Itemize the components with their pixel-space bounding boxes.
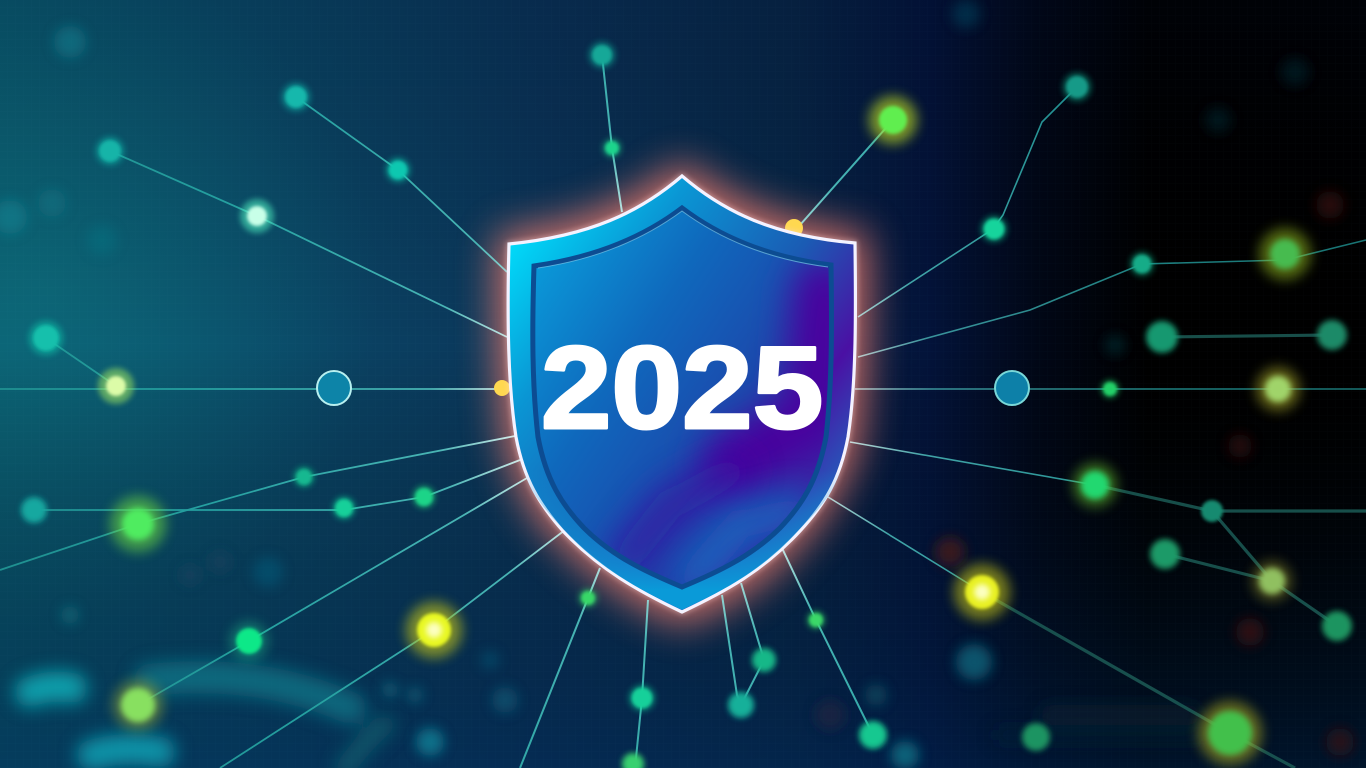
node: top-right lime (869, 96, 917, 144)
shield inner border (533, 208, 831, 587)
node: right dim green left (1146, 321, 1178, 353)
node: left ring (317, 371, 351, 405)
node: bright yellow right (954, 564, 1010, 620)
shield lower rim highlight (522, 465, 842, 610)
network connection lines: left (0, 97, 565, 768)
node: small green 344 (332, 496, 356, 520)
shield (508, 176, 855, 612)
blurred bottom-left swooshes (30, 677, 1200, 768)
node: right dim green right (1317, 320, 1347, 350)
node: left teal (28, 320, 64, 356)
node: shield-edge yellow left (494, 380, 510, 396)
node: far right dim green (1322, 611, 1352, 641)
node: right green (980, 215, 1008, 243)
node: below-shield teal right (752, 648, 776, 672)
node: lower-left green (230, 622, 268, 660)
node: right dim green 1165 (1150, 539, 1180, 569)
node: right small green (1100, 379, 1120, 399)
node: below-shield green (628, 684, 656, 712)
node: small green 424 (412, 485, 436, 509)
node: top teal (588, 41, 616, 69)
node: far-left teal (95, 136, 125, 166)
node: lower-left teal (21, 497, 47, 523)
node: top-left teal (281, 82, 311, 112)
node: right lime large (1259, 228, 1311, 280)
shield purple and blue bands (625, 290, 825, 580)
shield glow (507, 175, 857, 614)
node: bottom edge green (622, 753, 644, 768)
shield edge glow (508, 176, 855, 612)
node: lower-left pale lime (113, 680, 163, 730)
node: upper-right teal (1062, 72, 1092, 102)
year text: 2025 (541, 322, 823, 453)
node: right teal (1129, 251, 1155, 277)
node: upper-left teal (385, 157, 411, 183)
node: bottom-right large lime (1198, 701, 1262, 765)
network connection lines: right (828, 87, 1366, 592)
node: right green glow (1073, 463, 1117, 507)
node: left pale yellow (98, 368, 134, 404)
node: small green 304 (293, 466, 315, 488)
node: bottom green (859, 721, 887, 749)
node: right ring (995, 371, 1029, 405)
shield inner highlight line (538, 211, 828, 268)
network connection lines: top and bottom (520, 55, 893, 768)
node: below-shield teal low (728, 692, 754, 718)
node: right pale lime (1252, 561, 1292, 601)
node: lower-left lime large (110, 496, 166, 552)
node: bottom dim green (1022, 723, 1050, 751)
shield inner panel (533, 208, 831, 587)
node: bright yellow left (406, 602, 462, 658)
node: below-shield small green left (578, 588, 598, 608)
shield outer body (508, 176, 855, 612)
node: top small green (602, 138, 622, 158)
node: far right teal (1201, 500, 1223, 522)
node: shield-edge yellow top (785, 219, 803, 237)
network connection lines: far right dim (982, 335, 1366, 768)
node: white glow (240, 199, 274, 233)
node: below-shield small green right (806, 610, 826, 630)
node: far right pale yellow (1256, 367, 1300, 411)
